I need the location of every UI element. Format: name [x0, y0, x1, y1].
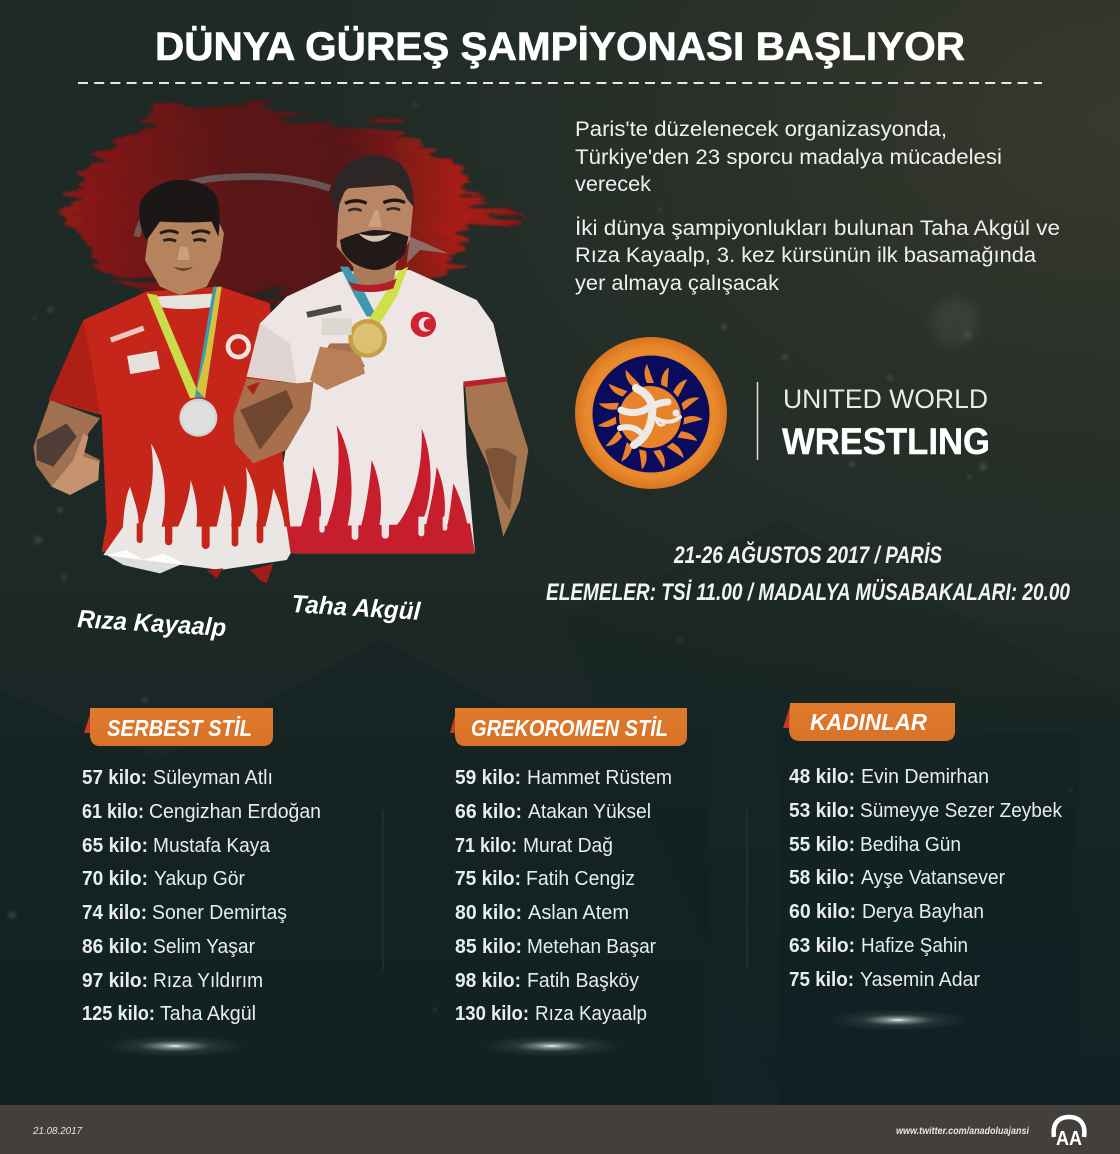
- panel: kadınlar: [783, 703, 1063, 1031]
- logo wordmark: [782, 384, 990, 462]
- weight list: serbest stil: 97 kilo:: [82, 970, 148, 992]
- weight list: kadınlar: Derya Bayhan: [862, 901, 984, 923]
- Taha Akgül figure: [233, 155, 528, 553]
- weight list: grekoromen stil: Murat Dağ: [523, 835, 613, 857]
- weight list: kadınlar: Yasemin Adar: [860, 969, 980, 991]
- weight list: grekoromen stil: Hammet Rüstem: [527, 767, 672, 789]
- heading badge: serbest stil: [84, 708, 273, 746]
- weight list: grekoromen stil: Aslan Atem: [528, 902, 629, 924]
- weight list: serbest stil: 61 kilo:: [82, 801, 144, 823]
- weight list: grekoromen stil: Rıza Kayaalp: [535, 1003, 647, 1025]
- footer bar: [0, 1105, 1120, 1154]
- weight list: grekoromen stil: 130 kilo:: [455, 1003, 529, 1025]
- weight list: grekoromen stil: 75 kilo:: [455, 868, 521, 890]
- footer social link: www.twitter.com/anadoluajansi: [896, 1126, 1029, 1137]
- panel: serbest stil: [82, 708, 321, 1057]
- weight list: serbest stil: 125 kilo:: [82, 1003, 155, 1025]
- weight list: grekoromen stil: [455, 767, 672, 1025]
- weight list: serbest stil: Yakup Gör: [154, 868, 245, 890]
- weight list: serbest stil: Rıza Yıldırım: [153, 970, 263, 992]
- weight list: serbest stil: 74 kilo:: [82, 902, 147, 924]
- weight list: grekoromen stil: 98 kilo:: [455, 970, 521, 992]
- intro text: [575, 117, 1060, 295]
- logo: United World Wrestling: [575, 337, 727, 489]
- weight list: kadınlar: Bediha Gün: [860, 834, 961, 856]
- weight list: kadınlar: Hafize Şahin: [861, 935, 968, 957]
- weight list: serbest stil: Taha Akgül: [160, 1003, 256, 1025]
- illustration: wrestlers with Turkish flag: [33, 97, 528, 583]
- intro text: verecek: [575, 172, 651, 196]
- weight list: kadınlar: 63 kilo:: [789, 935, 855, 957]
- weight list: grekoromen stil: 85 kilo:: [455, 936, 522, 958]
- weight list: kadınlar: Ayşe Vatansever: [861, 867, 1005, 889]
- weight list: serbest stil: Cengizhan Erdoğan: [149, 801, 321, 823]
- weight list: serbest stil: 70 kilo:: [82, 868, 148, 890]
- flag brush background: [65, 97, 528, 297]
- weight list: grekoromen stil: Fatih Cengiz: [526, 868, 635, 890]
- weight list: serbest stil: Süleyman Atlı: [153, 767, 273, 789]
- panel: grekoromen stil: [450, 708, 687, 1057]
- logo: wrestlers: [620, 388, 680, 445]
- icon: Anadolu Agency logo: [1054, 1117, 1084, 1150]
- Rıza Kayaalp figure: [33, 180, 297, 583]
- weight list: grekoromen stil: 80 kilo:: [455, 902, 522, 924]
- caption: Rıza Kayaalp: Rıza Kayaalp: [77, 605, 227, 642]
- weight list: grekoromen stil: Atakan Yüksel: [528, 801, 651, 823]
- intro text: Paris'te düzelenecek organizasyonda,: [575, 117, 947, 141]
- weight list: serbest stil: Selim Yaşar: [153, 936, 255, 958]
- weight list: grekoromen stil: Fatih Başköy: [527, 970, 639, 992]
- weight list: kadınlar: 60 kilo:: [789, 901, 856, 923]
- red flames on white shirt: [287, 425, 475, 553]
- logo: sun rays: [597, 364, 703, 470]
- footer date: 21.08.2017: [32, 1126, 82, 1137]
- white drips between flames: [319, 517, 447, 540]
- red drips between flames: [137, 520, 263, 549]
- intro text: İki dünya şampiyonlukları bulunan Taha Akgül ve: [575, 216, 1060, 240]
- weight list: serbest stil: Mustafa Kaya: [153, 835, 271, 857]
- heading badge: grekoromen stil: GREKOROMEN STİL: [471, 715, 668, 741]
- weight list: serbest stil: [82, 767, 321, 1025]
- icon: Anadolu Agency logo: AA: [1056, 1128, 1082, 1150]
- caption: Taha Akgül: Taha Akgül: [291, 590, 422, 626]
- weight list: kadınlar: Sümeyye Sezer Zeybek: [860, 800, 1063, 822]
- title: DÜNYA GÜREŞ ŞAMPİYONASI BAŞLIYOR: [155, 24, 965, 69]
- weight list: kadınlar: 48 kilo:: [789, 766, 855, 788]
- intro text: Rıza Kayaalp, 3. kez kürsünün ilk basamağında: [575, 243, 1036, 267]
- heading badge: kadınlar: KADINLAR: [810, 709, 927, 735]
- event date and schedule: [546, 541, 1071, 606]
- weight list: kadınlar: Evin Demirhan: [861, 766, 989, 788]
- weight list: grekoromen stil: Metehan Başar: [527, 936, 656, 958]
- logo wordmark: UNITED WORLD: [783, 384, 988, 414]
- weight list: kadınlar: 75 kilo:: [789, 969, 854, 991]
- weight list: serbest stil: 57 kilo:: [82, 767, 147, 789]
- heading badge: grekoromen stil: [450, 708, 687, 746]
- weight list: grekoromen stil: 66 kilo:: [455, 801, 522, 823]
- heading badge: kadınlar: [783, 703, 955, 741]
- logo wordmark: WRESTLING: [782, 421, 990, 462]
- weight list: grekoromen stil: 59 kilo:: [455, 767, 521, 789]
- weight list: serbest stil: Soner Demirtaş: [152, 902, 287, 924]
- weight list: kadınlar: 58 kilo:: [789, 867, 855, 889]
- event date and schedule: 21-26 AĞUSTOS 2017 / PARİS: [673, 541, 942, 569]
- heading badge: serbest stil: SERBEST STİL: [107, 715, 252, 741]
- weight list: kadınlar: 55 kilo:: [789, 834, 855, 856]
- weight list: kadınlar: 53 kilo:: [789, 800, 855, 822]
- weight list: grekoromen stil: 71 kilo:: [455, 835, 517, 857]
- intro text: yer almaya çalışacak: [575, 271, 779, 295]
- weight list: serbest stil: 86 kilo:: [82, 936, 148, 958]
- weight list: serbest stil: 65 kilo:: [82, 835, 148, 857]
- weight list: kadınlar: [789, 766, 1063, 991]
- white flames on red shirt: [103, 443, 297, 570]
- intro text: Türkiye'den 23 sporcu madalya mücadelesi: [575, 145, 1002, 169]
